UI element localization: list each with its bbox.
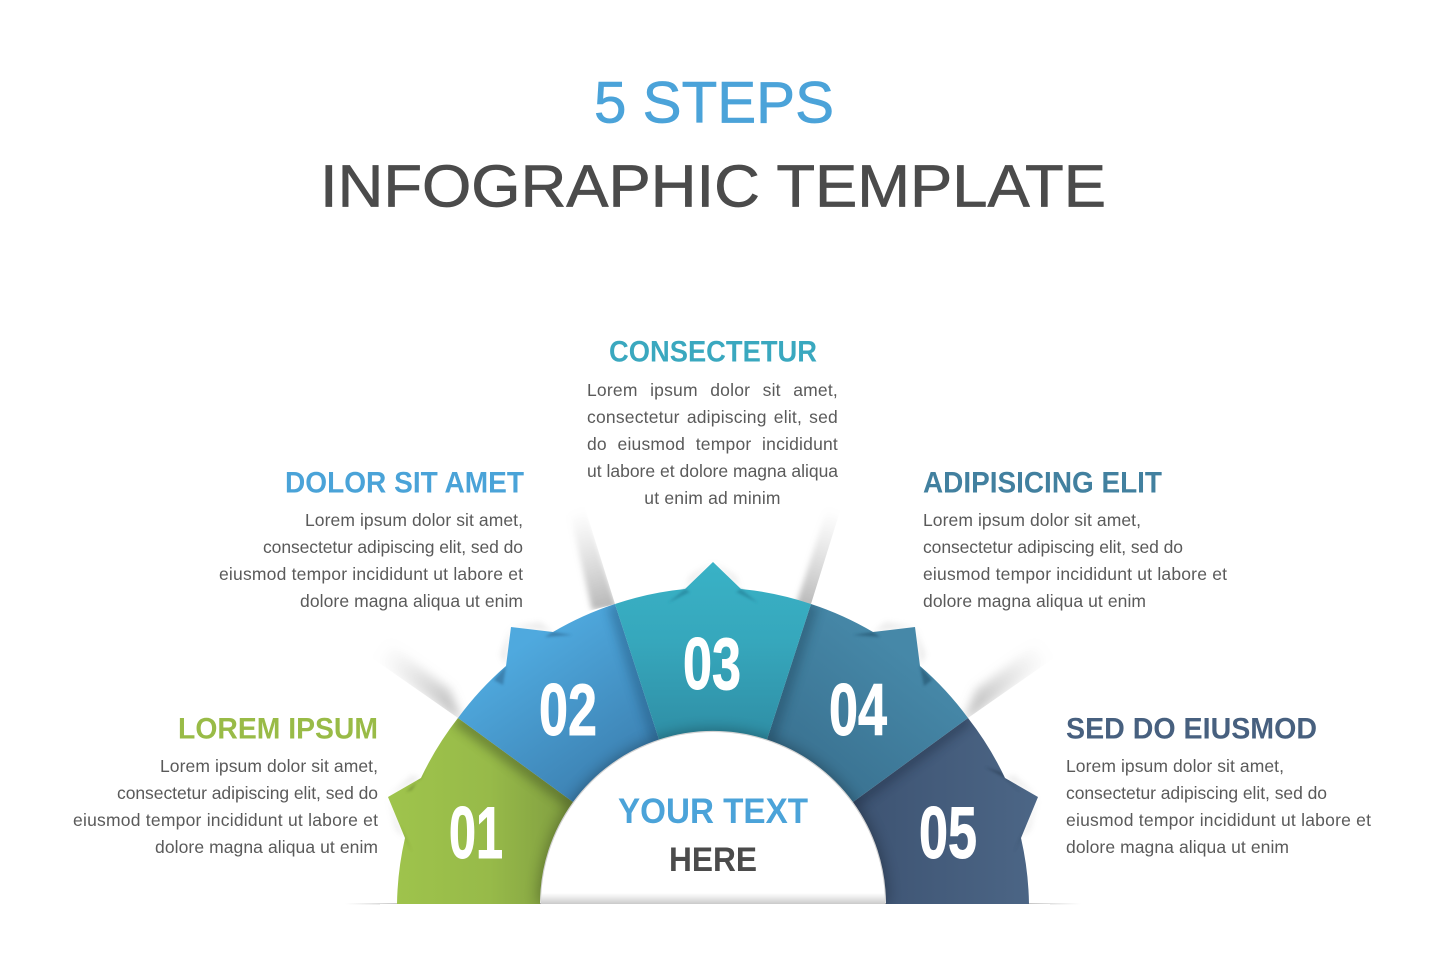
body: Lorem ipsum dolor sit amet, [1066,756,1284,776]
cast shadows between steps [375,508,1051,722]
text block: consectetur body: ut enim ad minim [644,488,781,508]
number 01: 01 [449,793,503,874]
body: consectetur adipiscing elit, sed do [923,537,1183,557]
body: eiusmod tempor incididunt ut labore et [923,564,1227,584]
body: consectetur adipiscing elit, sed do [263,537,523,557]
heading: SED DO EIUSMOD [1066,712,1317,746]
number 02: 02 [539,670,597,751]
title line: infographic template: INFOGRAPHIC TEMPLATE [320,154,1106,220]
heading: ADIPISICING ELIT [923,466,1162,500]
text block: sed do eiusmod [1066,712,1371,857]
number 04: 04 [829,670,887,751]
body [73,756,378,857]
soft shadows under arrow tips [388,562,1038,838]
segment 01: green [388,718,573,904]
body: dolore magna aliqua ut enim [155,837,378,857]
segment 05: navy [853,718,1038,904]
segment 02: blue [458,604,659,802]
body: consectetur adipiscing elit, sed do [1066,783,1327,803]
heading: LOREM IPSUM [178,712,378,746]
heading: consectetur: CONSECTETUR [609,336,817,368]
text block: consectetur body: Lorem ipsum dolor sit amet, [587,380,838,400]
baseline under the semicircle [345,903,1081,904]
text block: consectetur body [587,380,838,508]
title [320,70,1106,220]
text block: lorem ipsum [73,712,378,857]
title line: 5 steps: 5 STEPS [594,70,834,136]
heading: DOLOR SIT AMET [285,466,524,500]
center semicircle [380,729,1050,934]
center label: your text: YOUR TEXT [618,792,808,831]
body [1066,756,1371,857]
body [219,510,523,611]
body: dolore magna aliqua ut enim [300,591,523,611]
segment 04: slate teal [767,604,968,802]
text block: consectetur body: ut labore et dolore magna aliqua [587,460,838,480]
body: eiusmod tempor incididunt ut labore et [1066,810,1371,830]
body [923,510,1227,611]
text block: dolor sit amet [219,466,524,611]
step numbers [449,624,977,874]
text block: consectetur body: do eiusmod tempor incididunt [587,434,838,454]
body: dolore magna aliqua ut enim [923,591,1146,611]
body: dolore magna aliqua ut enim [1066,837,1289,857]
number 03: 03 [683,624,741,705]
text block: adipisicing elit [923,466,1227,611]
body: consectetur adipiscing elit, sed do [117,783,378,803]
text block: consectetur body: consectetur adipiscing elit, sed [587,406,838,426]
body: eiusmod tempor incididunt ut labore et [73,810,378,830]
center label: here: HERE [669,841,757,879]
body: Lorem ipsum dolor sit amet, [160,756,378,776]
body: eiusmod tempor incididunt ut labore et [219,564,523,584]
segment 03: teal [615,562,811,740]
number 05: 05 [919,793,977,874]
body: Lorem ipsum dolor sit amet, [305,510,523,530]
body: Lorem ipsum dolor sit amet, [923,510,1141,530]
